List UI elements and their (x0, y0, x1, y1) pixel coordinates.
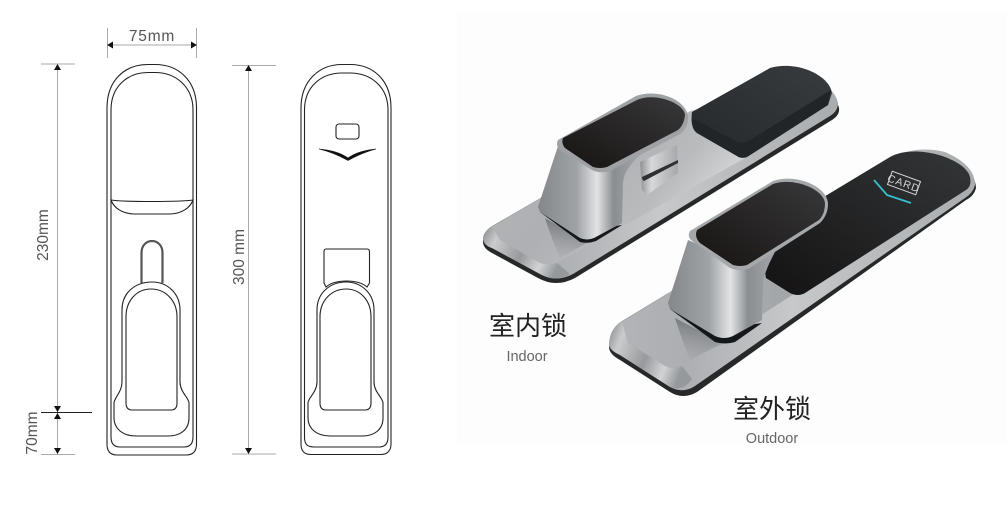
base plate shadow edge (483, 85, 839, 283)
inner body outline (304, 73, 388, 447)
photo: indoor lock (483, 66, 839, 283)
outer body outline (107, 64, 196, 455)
fingerprint slot (142, 241, 162, 283)
card reader icon (336, 124, 359, 139)
base plate top face (492, 105, 828, 264)
panel: product photo background (457, 12, 1007, 443)
latch lip (642, 160, 678, 181)
latch (640, 145, 678, 195)
base plate shadow edge (609, 151, 976, 396)
cyan chevron (874, 180, 911, 203)
drawing: indoor lock front view (107, 64, 196, 455)
stem shadow on plate (675, 318, 730, 360)
stem shadow (540, 212, 622, 243)
height dimension: 230mm and 70mm: 230mm (35, 209, 52, 261)
black panel (760, 152, 970, 295)
base plate rim (609, 150, 975, 390)
height dimension: 230mm and 70mm (24, 64, 92, 455)
width dimension: 75mm: 75mm (129, 28, 175, 45)
fingerprint window (324, 249, 370, 287)
handle outer outline (114, 282, 189, 436)
photo: outdoor lock (609, 150, 976, 396)
handle inner outline (126, 289, 177, 410)
base plate rim (483, 82, 838, 278)
battery cover seam (111, 200, 193, 214)
base plate top face (621, 215, 800, 368)
chevron mark (319, 149, 376, 160)
drawing: outdoor lock front view (301, 64, 391, 454)
handle top rim (557, 93, 688, 172)
outer body outline (301, 64, 391, 454)
width dimension: 75mm (107, 28, 197, 58)
front bevel (609, 322, 692, 388)
stem shadow (670, 309, 762, 344)
label: outdoor (733, 394, 811, 447)
label: indoor (489, 311, 567, 365)
handle dark face (562, 97, 685, 168)
handle stem (668, 240, 776, 338)
height dimension: 300 mm: 300 mm (231, 229, 248, 285)
grey pad (692, 66, 832, 158)
label: outdoor: 室外锁 (733, 394, 811, 424)
handle outer outline (308, 282, 383, 436)
stem shadow on plate (545, 218, 592, 258)
inner body outline (111, 72, 193, 447)
handle stem (538, 146, 640, 240)
label: outdoor: Outdoor (746, 431, 798, 447)
label: indoor: Indoor (506, 349, 548, 365)
card reader icon: CARD (886, 173, 922, 195)
height dimension: 300 mm (231, 65, 276, 454)
handle inner outline (320, 289, 371, 410)
handle top rim (689, 179, 828, 270)
handle dark face (696, 182, 825, 266)
label: indoor: 室内锁 (489, 311, 567, 341)
height dimension: 230mm and 70mm: 70mm (24, 411, 41, 455)
front bevel (483, 227, 570, 278)
pad side shade (692, 90, 831, 158)
